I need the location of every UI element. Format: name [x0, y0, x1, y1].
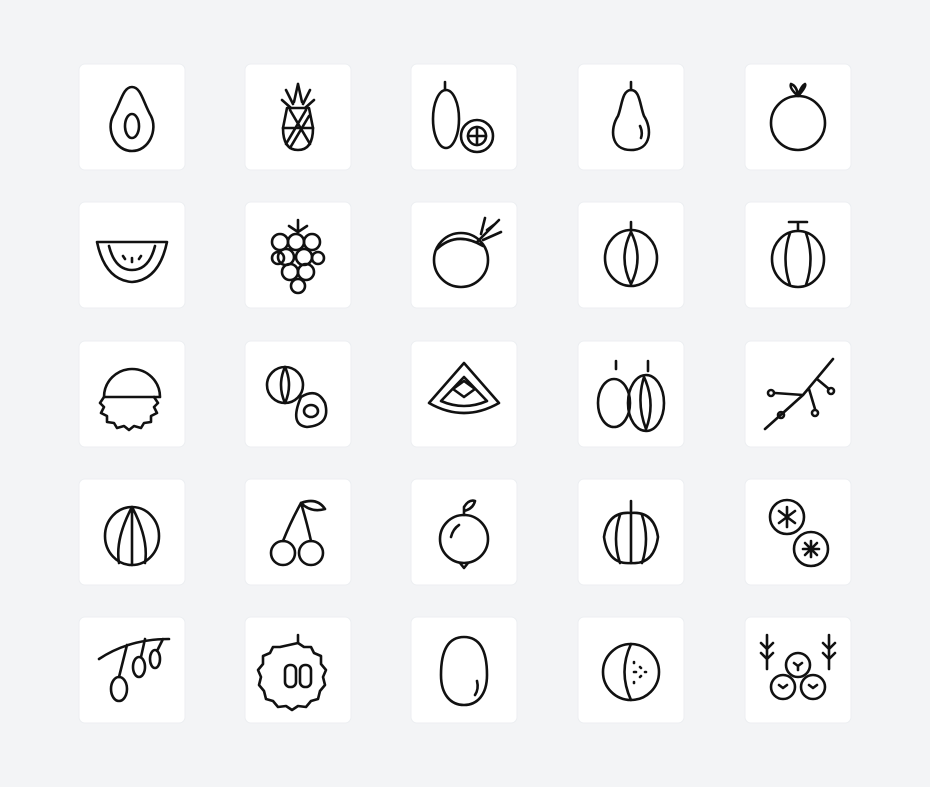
- icon: kiwi: [603, 644, 659, 700]
- icon: pumpkin: [604, 501, 658, 563]
- icon: orange: [771, 84, 825, 150]
- icon: dates branch: [99, 639, 169, 701]
- icon: watermelon slice: [429, 363, 499, 413]
- icon: plums: [598, 361, 664, 431]
- icon: pineapple: [282, 84, 314, 150]
- icon: lime slices: [770, 500, 828, 566]
- icon: apricot: [605, 222, 657, 286]
- icon: berries with leaves: [761, 635, 835, 699]
- icon: raspberry: [272, 220, 324, 293]
- icon: melon segments: [105, 507, 159, 565]
- icon: avocado: [111, 87, 153, 151]
- icon: lemon: [440, 501, 488, 568]
- icon: pear: [613, 82, 649, 150]
- icon: berries branch: [765, 359, 834, 429]
- icon: melon slice: [97, 242, 167, 282]
- icon: coconut: [434, 218, 501, 287]
- icon: durian: [258, 635, 326, 710]
- icon: papaya: [441, 637, 487, 705]
- icon: kumquat: [433, 82, 493, 152]
- icon: cherries: [271, 501, 325, 565]
- icon: cantaloupe: [772, 222, 824, 287]
- icon: lychee: [100, 369, 160, 430]
- icon: fig: [267, 367, 326, 427]
